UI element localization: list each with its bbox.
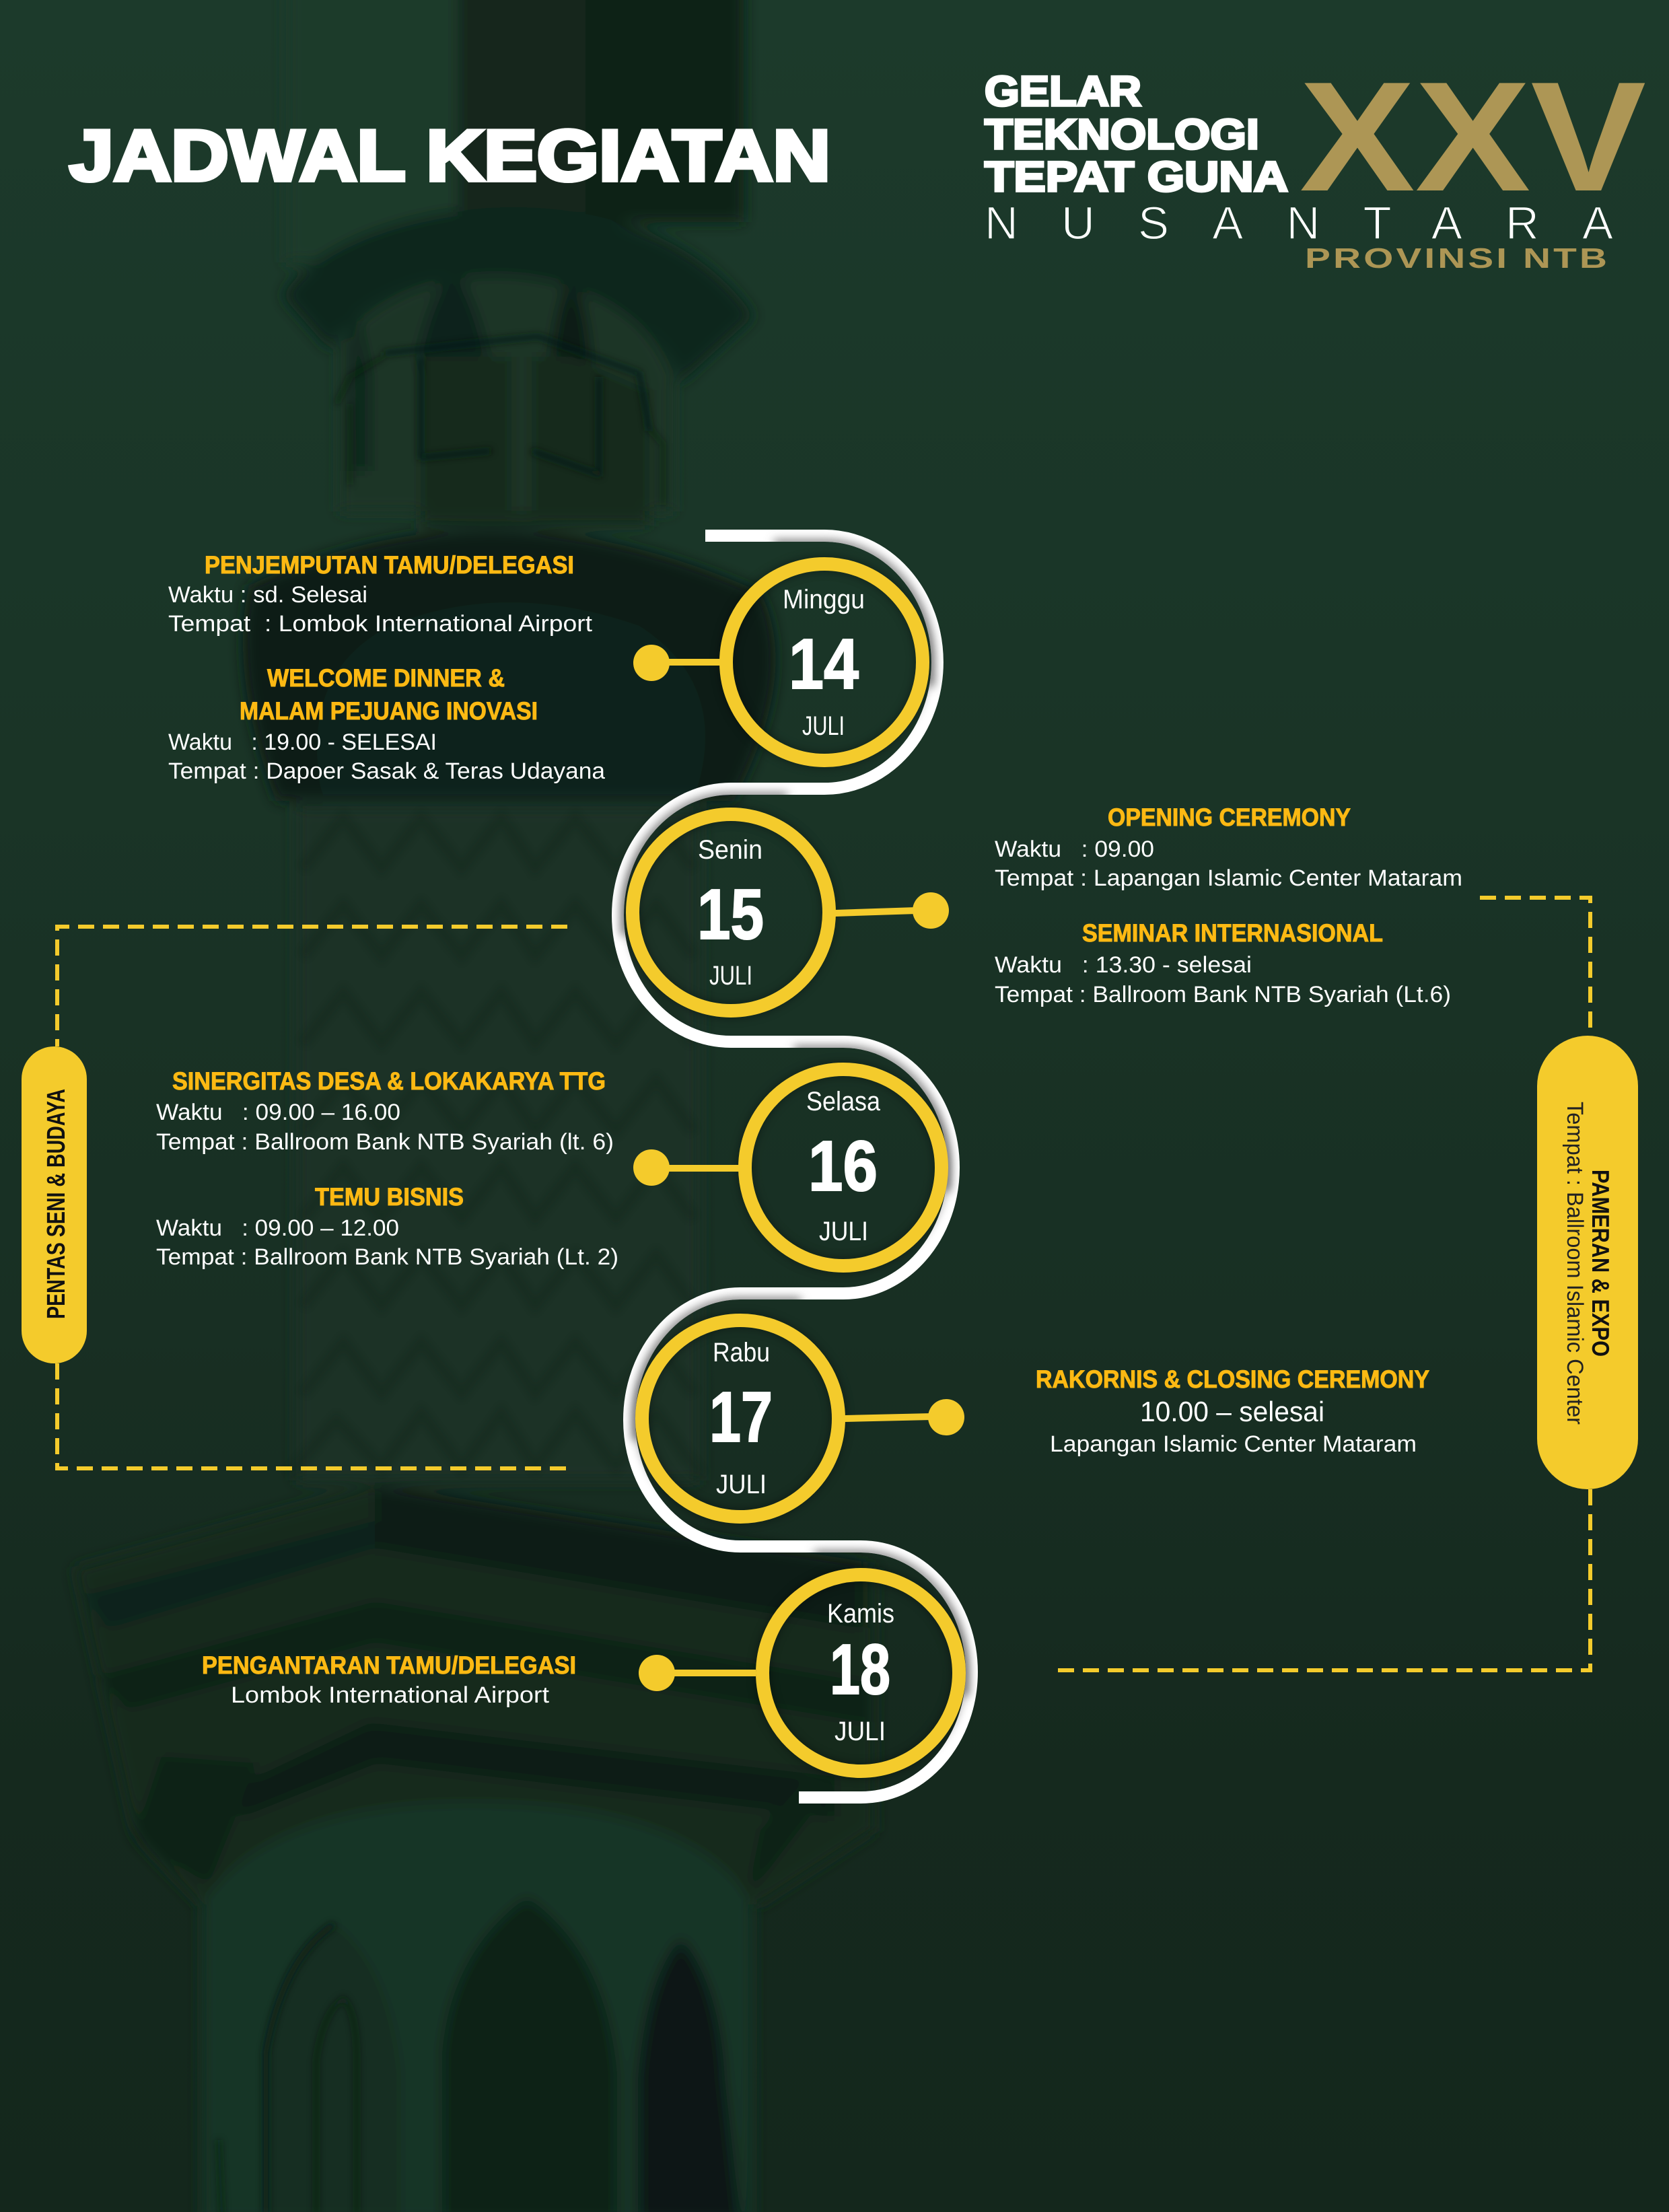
side pill: pameran & expo [1537, 1036, 1638, 1489]
schedule text: 15 Juli: OPENING CEREMONY [1108, 804, 1351, 831]
schedule text: 15 Juli: Waktu : 09.00 [995, 836, 1154, 862]
day 14 marker [633, 564, 923, 760]
day 15 marker: JULI [709, 961, 752, 991]
schedule text: 14 Juli [168, 551, 605, 784]
event logo: TEKNOLOGI [985, 111, 1259, 158]
schedule text: 16 Juli: Waktu : 09.00 – 16.00 [156, 1100, 400, 1125]
schedule text: 18 Juli [202, 1651, 576, 1708]
schedule text: 16 Juli: Tempat : Ballroom Bank NTB Syariah (lt. 6) [156, 1129, 614, 1155]
schedule text: 16 Juli: Tempat : Ballroom Bank NTB Syariah (Lt. 2) [156, 1244, 618, 1270]
day 14 marker: JULI [802, 711, 845, 741]
day 17 marker: 17 [709, 1378, 773, 1457]
day 15 marker: 15 [697, 875, 764, 954]
schedule text: 16 Juli: TEMU BISNIS [315, 1183, 464, 1211]
side pill: pameran & expo: Tempat : Ballroom Islamic Center [1562, 1102, 1588, 1425]
dashed connector: pentas seni [57, 927, 572, 1468]
day 16 marker: Selasa [806, 1087, 881, 1116]
schedule text: 15 Juli: Tempat : Ballroom Bank NTB Syariah (Lt.6) [995, 982, 1451, 1007]
event logo [985, 50, 1646, 274]
day 17 marker: JULI [716, 1470, 767, 1499]
schedule text: 18 Juli: PENGANTARAN TAMU/DELEGASI [202, 1651, 576, 1679]
schedule text: 16 Juli: SINERGITAS DESA & LOKAKARYA TTG [172, 1067, 606, 1095]
day 18 marker: Kamis [827, 1599, 894, 1629]
side pill: pentas seni & budaya: PENTAS SENI & BUDAYA [42, 1089, 71, 1319]
day 15 marker [633, 814, 949, 1011]
event logo: NUSANTARA [985, 197, 1613, 249]
side pill: pentas seni & budaya [22, 1046, 87, 1363]
day 17 marker [642, 1320, 964, 1517]
day 14 marker: Minggu [783, 585, 865, 614]
event logo: PROVINSI NTB [1305, 242, 1610, 274]
schedule text: 17 Juli: 10.00 – selesai [1140, 1396, 1324, 1427]
schedule text: 14 Juli: WELCOME DINNER & [267, 664, 505, 692]
side pill: pameran & expo: PAMERAN & EXPO [1587, 1170, 1614, 1357]
schedule text: 14 Juli: Tempat : Lombok International Airport [168, 611, 593, 637]
day 18 marker: 18 [830, 1630, 890, 1709]
day 18 marker [639, 1575, 959, 1771]
schedule text: 16 Juli: Waktu : 09.00 – 12.00 [156, 1215, 399, 1241]
schedule text: 14 Juli: Tempat : Dapoer Sasak & Teras Udayana [168, 758, 605, 784]
schedule text: 15 Juli: SEMINAR INTERNASIONAL [1082, 919, 1383, 947]
day 17 marker: Rabu [713, 1338, 770, 1367]
schedule text: 16 Juli [156, 1067, 618, 1270]
schedule text: 17 Juli: Lapangan Islamic Center Mataram [1050, 1431, 1417, 1457]
event logo: XXV [1300, 50, 1646, 224]
event logo: GELAR [985, 68, 1141, 115]
day 15 marker: Senin [698, 835, 762, 865]
day 16 marker: 16 [808, 1127, 878, 1206]
day 18 marker: JULI [834, 1717, 886, 1746]
schedule text: 15 Juli: Waktu : 13.30 - selesai [995, 952, 1252, 978]
schedule text: 14 Juli: Waktu : sd. Selesai [168, 582, 367, 608]
schedule text: 17 Juli [1036, 1365, 1429, 1457]
event logo: TEPAT GUNA [985, 153, 1288, 201]
dashed connector: pameran [1058, 898, 1590, 1670]
schedule text: 15 Juli: Tempat : Lapangan Islamic Center Mataram [995, 865, 1462, 891]
schedule text: 17 Juli: RAKORNIS & CLOSING CEREMONY [1036, 1365, 1429, 1393]
schedule text: 15 Juli [995, 804, 1462, 1007]
title: JADWAL KEGIATAN [69, 115, 830, 196]
day 16 marker [633, 1069, 942, 1266]
schedule text: 14 Juli: MALAM PEJUANG INOVASI [240, 697, 538, 725]
schedule text: 14 Juli: Waktu : 19.00 - SELESAI [168, 729, 437, 755]
winding white ribbon [618, 536, 972, 1797]
schedule text: 14 Juli: PENJEMPUTAN TAMU/DELEGASI [205, 551, 574, 579]
day 16 marker: JULI [819, 1217, 868, 1246]
day 14 marker: 14 [789, 625, 859, 704]
schedule text: 18 Juli: Lombok International Airport [231, 1682, 550, 1708]
